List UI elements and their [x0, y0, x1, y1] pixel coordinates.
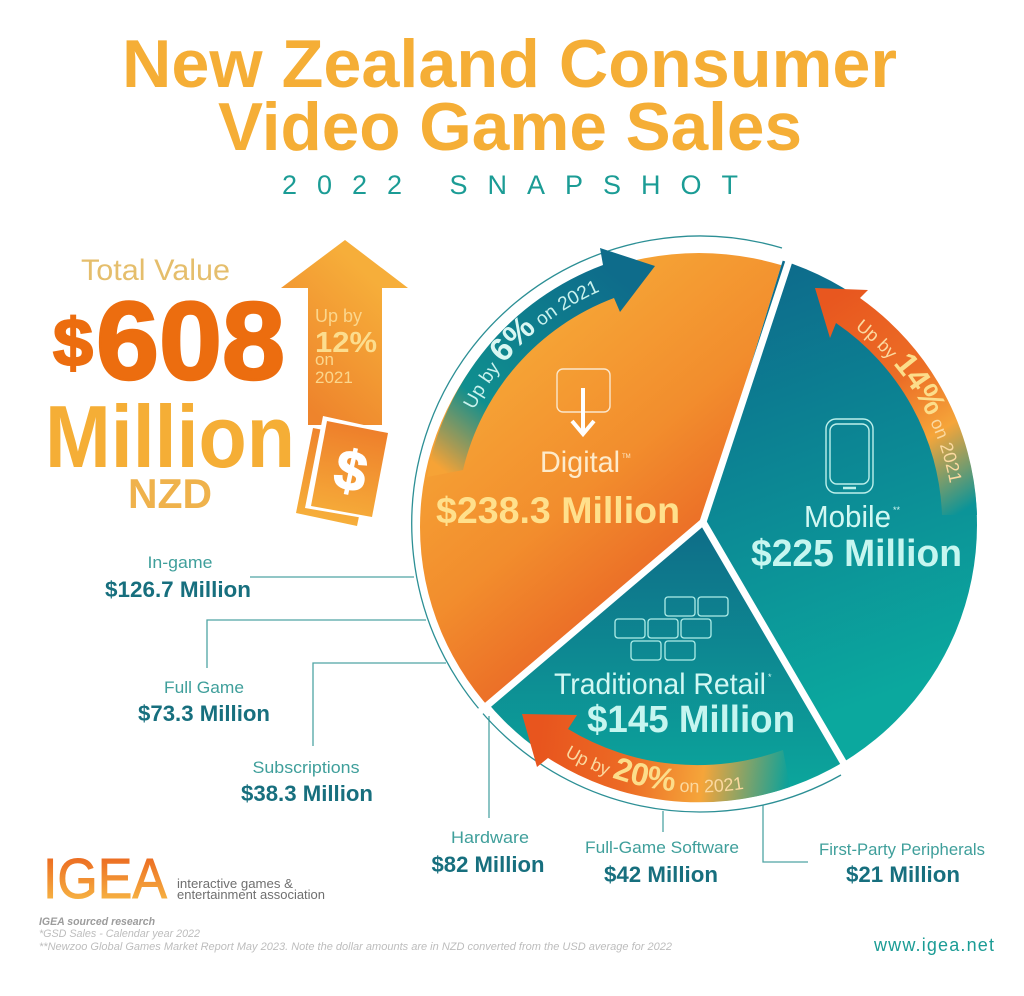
- mobile label: [751, 419, 962, 575]
- slice: mobile: [706, 260, 977, 760]
- connector lines: [207, 577, 808, 862]
- total value block: $: [53, 305, 93, 381]
- slice: traditional retail: [491, 527, 840, 802]
- digital label: [436, 369, 680, 531]
- arrow: digital up by 6%: [432, 248, 655, 472]
- footnotes: **Newzoo Global Games Market Report May 2023. Note the dollar amounts are in NZD converted from the USD average for 2022: [39, 941, 672, 953]
- label: subscriptions: $38.3 Million: [241, 781, 373, 806]
- arrow: retail up by 20%: Up by 20% on 2021: [567, 746, 744, 792]
- label: subscriptions: Subscriptions: [252, 758, 360, 777]
- arrow: mobile up by 14%: [815, 288, 977, 515]
- slice dividers: [476, 258, 846, 767]
- retail label: *: [768, 672, 772, 682]
- up arrow: total value growth: 12%: [315, 327, 377, 359]
- icon: dollar bills: [296, 416, 391, 526]
- up arrow: total value growth: Up by: [315, 306, 362, 326]
- subtitle: 2022 SNAPSHOT: [282, 170, 738, 200]
- retail label: [554, 597, 795, 741]
- label: hardware: [432, 828, 544, 877]
- arrow: digital up by 6%: Up by 6% on 2021: [463, 280, 600, 408]
- pie chart: [420, 253, 977, 802]
- label: full game: $73.3 Million: [138, 701, 270, 726]
- label: in-game: In-game: [148, 553, 212, 572]
- icon: bricks: [615, 597, 728, 660]
- total value block: [45, 254, 295, 517]
- label: full-game software: Full-Game Software: [585, 838, 739, 857]
- total value block: NZD: [128, 470, 212, 517]
- title: [122, 26, 897, 165]
- up arrow: total value growth: [281, 240, 408, 425]
- label: full game: Full Game: [164, 678, 244, 697]
- footnotes: [39, 916, 672, 953]
- retail label: $145 Million: [587, 699, 795, 741]
- arrow: mobile up by 14%: Up by 14% on 2021: [858, 319, 962, 483]
- up arrow: total value growth: on: [315, 350, 334, 369]
- mobile label: $225 Million: [751, 533, 962, 575]
- icon: download: [557, 369, 610, 434]
- total value block: 608: [96, 280, 285, 403]
- logo: IGEA: entertainment association: [177, 887, 325, 902]
- label: full-game software: $42 Million: [604, 862, 718, 887]
- label: subscriptions: [241, 758, 373, 806]
- arrow: retail up by 20%: [522, 714, 790, 802]
- up arrow: total value growth: 2021: [315, 368, 353, 387]
- label: first-party peripherals: $21 Million: [846, 862, 960, 887]
- footnotes: *GSD Sales - Calendar year 2022: [39, 928, 200, 940]
- logo: IGEA: [43, 847, 325, 911]
- digital label: $238.3 Million: [436, 490, 680, 531]
- title: Video Game Sales: [218, 89, 802, 165]
- footnotes: IGEA sourced research: [39, 916, 155, 928]
- mobile label: Mobile: [804, 499, 891, 534]
- icon: dollar bills: $: [329, 436, 373, 505]
- label: full-game software: [585, 838, 739, 887]
- digital label: Digital: [540, 446, 620, 479]
- label: hardware: Hardware: [451, 828, 529, 847]
- outer ring: [412, 236, 841, 812]
- total value block: Million: [45, 387, 295, 486]
- label: first-party peripherals: First-Party Peripherals: [819, 840, 985, 859]
- label: full game: [138, 678, 270, 726]
- logo: IGEA: interactive games &: [177, 876, 293, 891]
- retail label: Traditional Retail: [554, 668, 766, 701]
- label: hardware: $82 Million: [432, 852, 544, 877]
- mobile label: **: [893, 505, 901, 515]
- total value block: Total Value: [81, 254, 230, 287]
- website: www.igea.net: [873, 935, 994, 955]
- label: first-party peripherals: [819, 840, 985, 887]
- label: in-game: [105, 553, 251, 602]
- digital label: TM: [622, 454, 631, 460]
- logo: IGEA: IGEA: [43, 847, 167, 911]
- slice: digital: [420, 253, 782, 703]
- title: New Zealand Consumer: [122, 26, 897, 102]
- icon: phone: [826, 419, 873, 493]
- label: in-game: $126.7 Million: [105, 577, 251, 602]
